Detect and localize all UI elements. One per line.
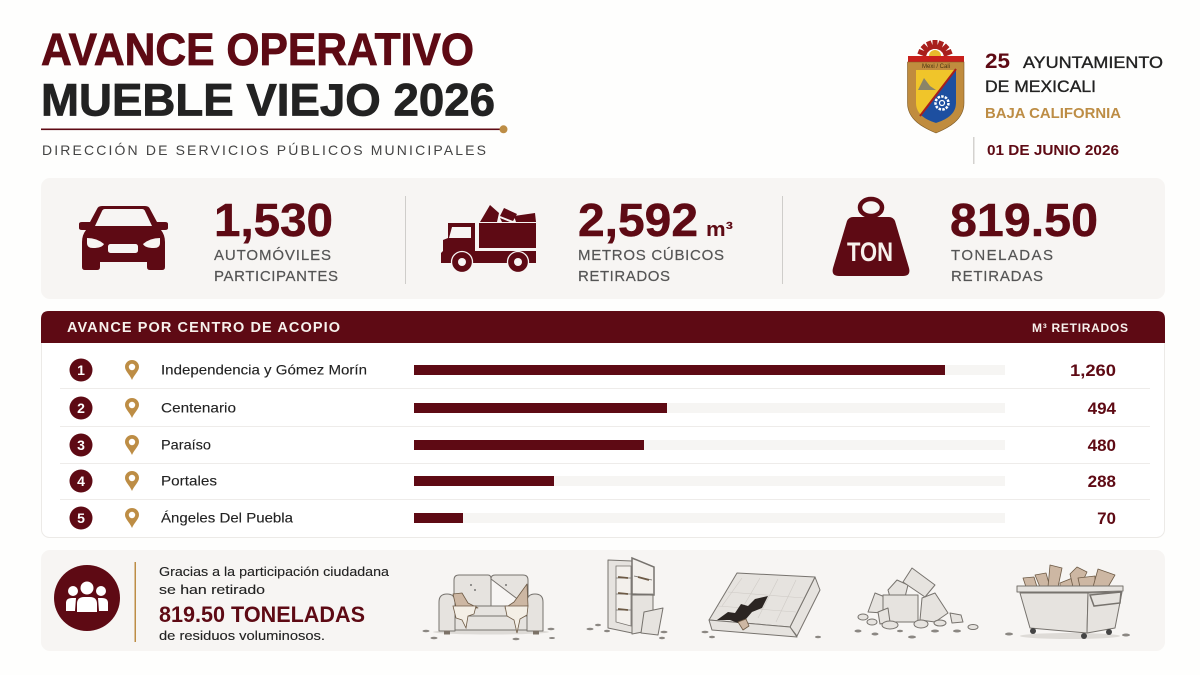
table header: M³ RETIRADOS [1032, 321, 1128, 335]
illustration: broken shelf [586, 558, 668, 639]
icon: car [79, 206, 168, 270]
stat: cubic metres: METROS CÚBICOS [578, 247, 724, 264]
stat: tonnes: RETIRADAS [951, 268, 1043, 285]
icon: municipal shield: Mexi / Cali [922, 64, 950, 70]
row 2: Centenario [161, 400, 236, 416]
table header: AVANCE POR CENTRO DE ACOPIO [67, 320, 340, 336]
icon: municipal shield [908, 40, 964, 133]
row 1: 1,260 [1070, 361, 1116, 380]
row 1: Independencia y Gómez Morín [161, 362, 367, 378]
closing text: se han retirado [159, 582, 265, 597]
row 3: 3 [77, 437, 85, 453]
title [41, 24, 495, 126]
organization block: AYUNTAMIENTO [1023, 53, 1163, 72]
stat: tonnes: TONELADAS [951, 247, 1053, 264]
icon: citizens [54, 565, 120, 631]
stat: cubic metres: 2,592 [578, 194, 698, 246]
row 3: 480 [1088, 436, 1116, 455]
stat: tonnes [950, 194, 1098, 285]
closing text: Gracias a la participación ciudadana [159, 564, 390, 579]
row 3: Paraíso [161, 436, 211, 452]
row 4: 288 [1088, 472, 1116, 491]
row 5: 5 [77, 510, 85, 526]
stat: automobiles: AUTOMÓVILES [214, 247, 331, 264]
illustration: full dumpster [1005, 565, 1130, 639]
illustration: damaged sofa [422, 575, 555, 640]
title underline [41, 125, 508, 133]
closing text [159, 564, 390, 643]
closing text: de residuos voluminosos. [159, 628, 325, 643]
stat: cubic metres: RETIRADOS [578, 268, 670, 285]
row 3 [70, 434, 1116, 456]
stat: cubic metres: m³ [706, 219, 733, 241]
panel: key figures [41, 178, 1165, 299]
organization block [985, 50, 1163, 122]
subtitle: DIRECCIÓN DE SERVICIOS PÚBLICOS MUNICIPALES [42, 142, 486, 158]
icon: weight [833, 199, 909, 276]
row 5 [70, 506, 1116, 530]
stat: automobiles [214, 194, 338, 285]
organization block: DE MEXICALI [985, 77, 1096, 96]
organization block: 25 [985, 50, 1010, 73]
row 5: 70 [1097, 509, 1116, 528]
row 2: 494 [1088, 399, 1117, 418]
row 2 [70, 396, 1117, 420]
illustration: rubble pile [854, 568, 978, 638]
stat: automobiles: 1,530 [214, 194, 333, 246]
panel: collection centres [41, 311, 1165, 538]
stat: automobiles: PARTICIPANTES [214, 268, 338, 285]
closing text: 819.50 TONELADAS [159, 602, 365, 627]
panel: closing message [41, 550, 1165, 651]
stat: cubic metres [578, 194, 733, 285]
date: 01 DE JUNIO 2026 [987, 143, 1119, 159]
icon: truck [441, 205, 536, 272]
title: MUEBLE VIEJO 2026 [41, 74, 495, 126]
title: AVANCE OPERATIVO [41, 24, 474, 75]
icon: weight: TON [847, 237, 893, 267]
row 1: 1 [77, 362, 85, 378]
row 4 [70, 470, 1116, 492]
row 1 [70, 358, 1116, 382]
organization block: BAJA CALIFORNIA [985, 105, 1121, 122]
row 4: Portales [161, 472, 217, 488]
row 4: 4 [77, 473, 85, 489]
row 2: 2 [77, 400, 85, 416]
row 5: Ángeles Del Puebla [161, 510, 293, 526]
table header [41, 311, 1165, 343]
stat: tonnes: 819.50 [950, 194, 1098, 246]
illustration: torn mattress [702, 573, 821, 638]
